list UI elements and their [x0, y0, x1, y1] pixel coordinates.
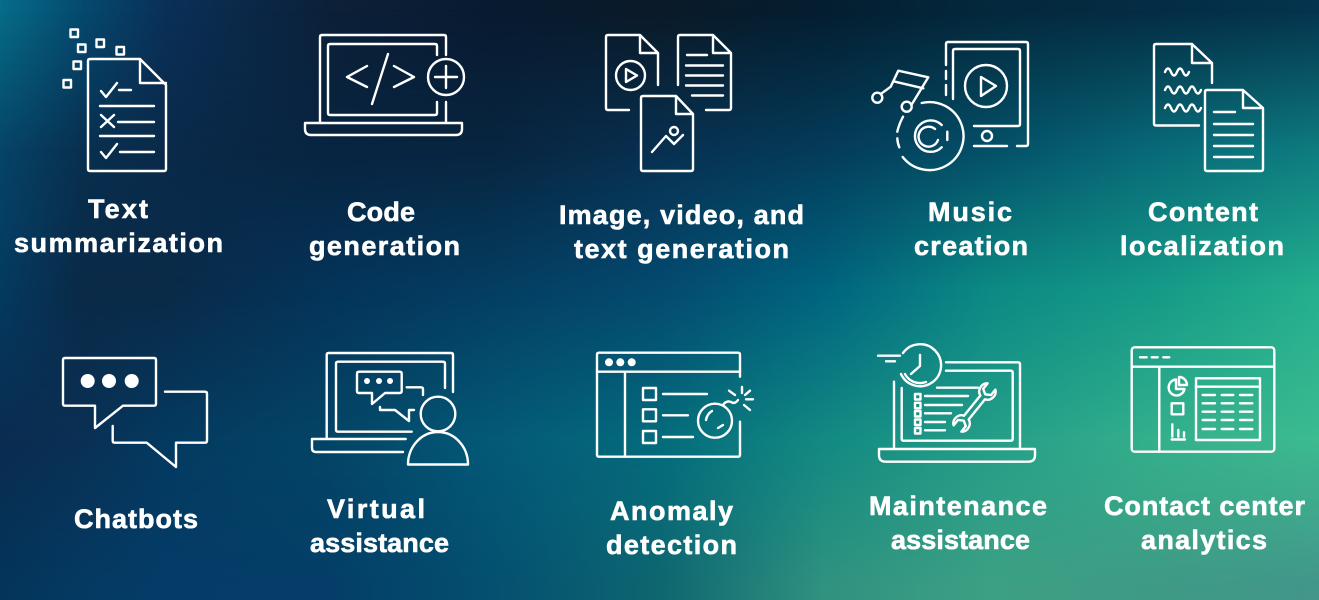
label: contact center analytics: analytics — [1141, 525, 1267, 555]
label: chatbots: Chatbots — [74, 504, 198, 534]
label: music creation: Music — [928, 197, 1012, 227]
label: image, video, and text generation: Image, video, and — [559, 200, 804, 230]
label: text summarization: Text — [88, 194, 148, 224]
icon: code generation laptop — [305, 35, 464, 135]
label: contact center analytics — [1104, 491, 1305, 555]
label: code generation: Code — [347, 197, 415, 227]
label: maintenance assistance — [869, 491, 1047, 555]
label: content localization — [1120, 197, 1284, 261]
icon: contact center analytics window — [1132, 347, 1274, 452]
label: anomaly detection: detection — [606, 530, 737, 560]
label: text summarization: summarization — [14, 228, 223, 258]
icon: maintenance laptop with clock and wrench — [878, 344, 1035, 462]
label: content localization: localization — [1120, 231, 1284, 261]
label: image, video, and text generation — [559, 200, 804, 264]
label: contact center analytics: Contact center — [1104, 491, 1305, 521]
label: anomaly detection: Anomaly — [610, 496, 733, 526]
icon: text summarization document — [64, 30, 166, 171]
label: code generation: generation — [309, 231, 460, 261]
label: virtual assistance: Virtual — [327, 494, 425, 524]
label: virtual assistance: assistance — [310, 528, 449, 558]
label: music creation — [914, 197, 1028, 261]
label: content localization: Content — [1148, 197, 1258, 227]
icon: virtual assistance laptop with person — [312, 353, 468, 464]
icon: anomaly detection window with bomb — [597, 353, 753, 457]
label: virtual assistance — [310, 494, 449, 558]
label: maintenance assistance: assistance — [891, 525, 1030, 555]
icon: chatbots speech bubbles — [63, 358, 207, 467]
icon: content localization documents — [1154, 44, 1263, 171]
label: anomaly detection — [606, 496, 737, 560]
label: maintenance assistance: Maintenance — [869, 491, 1047, 521]
label: music creation: creation — [914, 231, 1028, 261]
icon: music creation — [872, 42, 1028, 170]
label: code generation — [309, 197, 460, 261]
label: text summarization — [14, 194, 223, 258]
label: image, video, and text generation: text generation — [574, 234, 789, 264]
icon: image, video and text documents — [606, 35, 731, 171]
